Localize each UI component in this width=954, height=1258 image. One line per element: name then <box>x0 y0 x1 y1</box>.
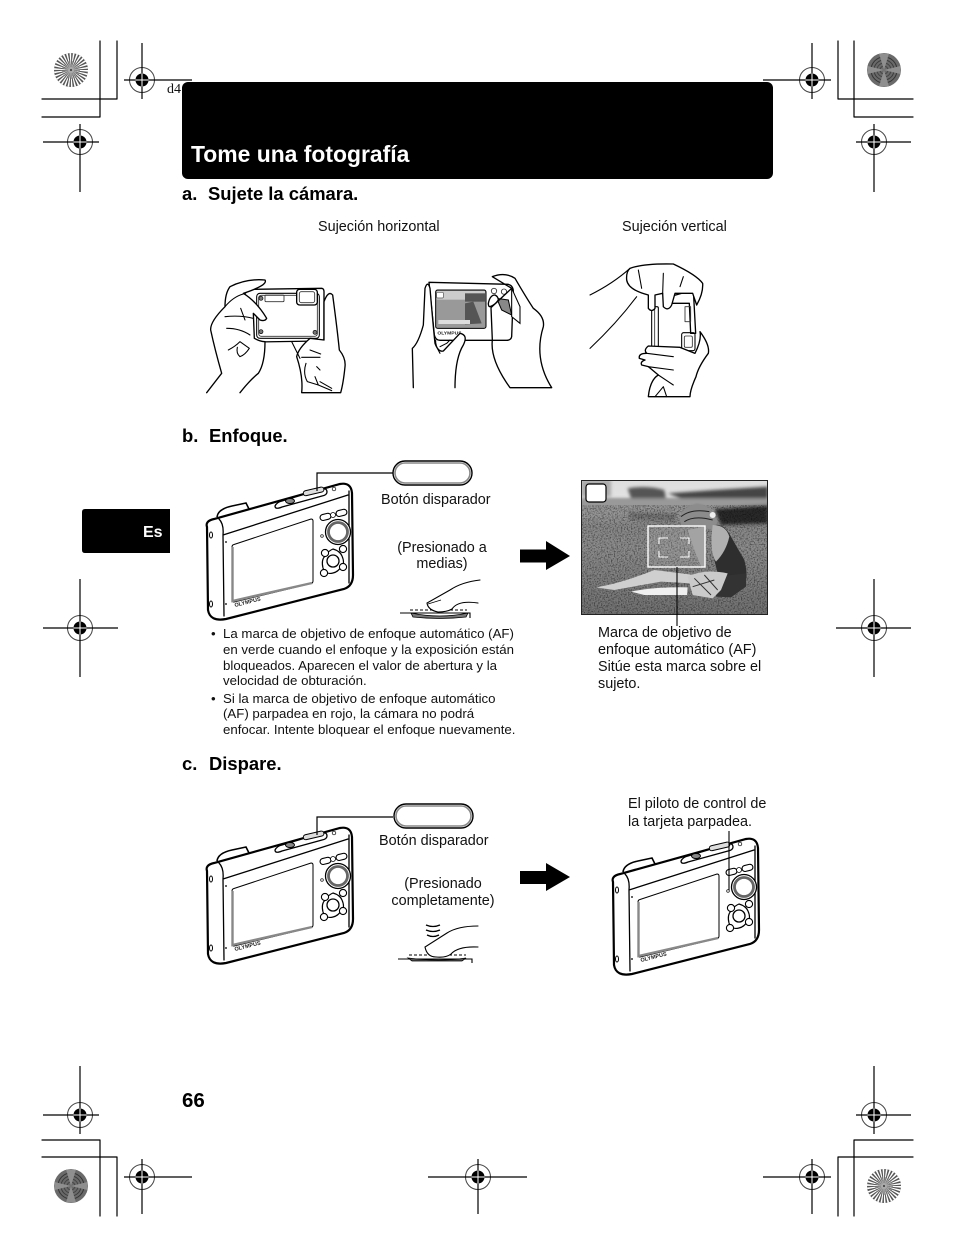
photo: woman on grass <box>581 480 768 615</box>
label: card light: El piloto de control de <box>628 796 766 812</box>
bullet 2: enfocar. Intente bloquear el enfoque nuevamente. <box>223 722 515 737</box>
registration mark: left upper <box>43 124 99 192</box>
label: fully pressed: (Presionado <box>404 876 482 892</box>
registration mark: right lower <box>856 1066 911 1134</box>
shutter button icon b <box>393 461 472 485</box>
crop marks: top left <box>42 41 117 117</box>
label: shutter button b: Botón disparador <box>381 492 491 508</box>
registration mark: right upper <box>856 124 911 192</box>
heading a: Sujete la cámara. <box>208 183 358 204</box>
label: half pressed: medias) <box>416 556 468 572</box>
bullet 1: en verde cuando el enfoque y la exposición están <box>223 642 514 657</box>
crop marks: bottom left <box>42 1140 117 1216</box>
leader line: shutter button b <box>317 473 393 491</box>
bullet notes <box>211 626 515 737</box>
print slug text: d4 <box>167 82 181 97</box>
colour wheel: bottom left <box>54 1169 88 1203</box>
heading c: Dispare. <box>209 753 282 774</box>
leader line: shutter button c <box>317 817 393 835</box>
crop marks: bottom right <box>838 1140 913 1216</box>
leader line: AF mark <box>676 567 678 626</box>
label: horizontal grip: Sujeción horizontal <box>318 219 440 235</box>
heading a: a. <box>182 183 197 204</box>
icon: finger full press <box>398 925 478 963</box>
registration mark: top right horizontal <box>763 43 831 99</box>
label: vertical grip: Sujeción vertical <box>622 219 727 235</box>
heading c: c. <box>182 753 197 774</box>
label: half pressed: (Presionado a <box>397 540 487 556</box>
colour wheel: top left <box>54 53 88 87</box>
label: card light: la tarjeta parpadea. <box>628 814 752 830</box>
colour wheel: bottom right <box>867 1169 901 1203</box>
illustration: hands holding camera from front <box>207 280 345 393</box>
registration mark: top left horizontal <box>124 43 192 99</box>
language tab <box>82 509 170 553</box>
AF target box <box>648 526 705 567</box>
crop marks: top right <box>838 41 913 117</box>
camera: half press <box>207 484 353 620</box>
heading b: b. <box>182 425 198 446</box>
title: Tome una fotografía <box>191 141 410 167</box>
language tab: Es <box>143 524 163 541</box>
label: AF target mark: Marca de objetivo de <box>598 625 732 641</box>
icon: finger half press <box>400 580 480 618</box>
bullet 1: bloqueados. Aparecen el valor de abertura y la <box>223 658 498 673</box>
arrow c <box>520 863 570 891</box>
bullet 1: La marca de objetivo de enfoque automático (AF) <box>223 626 514 641</box>
registration mark: left lower <box>43 1066 99 1134</box>
label: shutter button c: Botón disparador <box>379 833 489 849</box>
leader line: card light <box>728 831 730 890</box>
label: AF target mark: enfoque automático (AF) <box>598 642 756 658</box>
bullet 2: Si la marca de objetivo de enfoque automático <box>223 691 496 706</box>
page number: 66 <box>182 1089 205 1112</box>
shutter button icon c <box>394 804 473 828</box>
bullet 2: • <box>211 691 216 706</box>
mode icon box <box>586 484 606 502</box>
registration mark: bottom centre <box>428 1159 527 1214</box>
label: AF target mark: Sitúe esta marca sobre el <box>598 659 761 675</box>
illustration: hands holding camera from back: OLYMPUS <box>437 330 462 336</box>
label: fully pressed: completamente) <box>391 893 495 909</box>
bullet 1: velocidad de obturación. <box>223 673 367 688</box>
label: AF target mark: sujeto. <box>598 676 640 692</box>
illustration: hands holding camera vertically <box>590 264 709 397</box>
registration mark: right middle <box>836 579 911 677</box>
bullet 2: (AF) parpadea en rojo, la cámara no podrá <box>223 706 475 721</box>
registration mark: bottom right <box>763 1159 831 1214</box>
registration mark: left middle <box>43 579 118 677</box>
heading b: Enfoque. <box>209 425 288 446</box>
camera: full press <box>207 828 353 964</box>
arrow b <box>520 541 570 570</box>
bullet 1: • <box>211 626 216 641</box>
header banner <box>182 82 773 179</box>
colour wheel: top right <box>867 53 901 87</box>
registration mark: bottom left <box>124 1159 192 1214</box>
illustration: hands holding camera from back <box>412 275 552 388</box>
camera: result <box>613 839 759 975</box>
